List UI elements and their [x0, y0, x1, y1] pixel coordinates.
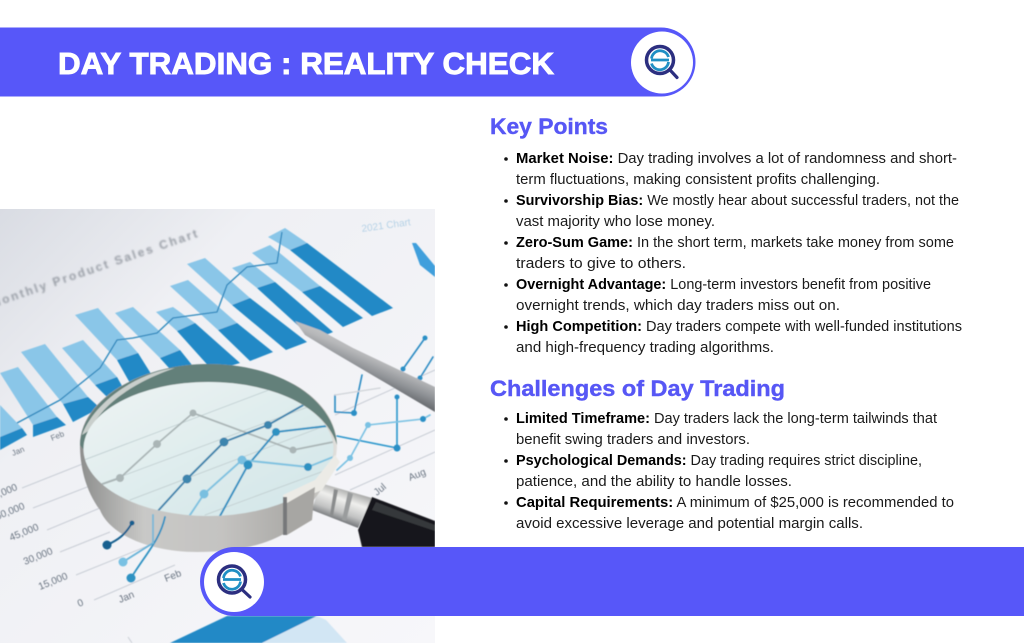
bullet: psychological demands: Psychological Demands: Day trading requires strict discipline,: [516, 452, 922, 469]
lower bar fragment: [170, 616, 317, 643]
axis labels: Jul: [372, 482, 389, 498]
bullet: survivorship bias: vast majority who lose money.: [516, 213, 715, 230]
axis labels: 45,000: [8, 522, 41, 544]
bullet: survivorship bias: Survivorship Bias: We mostly hear about successful traders, not the: [516, 192, 959, 209]
pen: [295, 321, 435, 412]
axis labels: Jan: [10, 445, 26, 458]
magnifier clip: [283, 455, 340, 505]
banner shape: [200, 547, 1024, 616]
bullet: zero-sum game: traders to give to others.: [516, 255, 686, 272]
bullet: psychological demands: patience, and the ability to handle losses.: [516, 473, 792, 490]
logo: top: [631, 32, 693, 94]
bullet: capital requirements: [504, 494, 954, 532]
bullet: high competition: [504, 318, 962, 356]
axis labels: [0, 429, 428, 610]
magnifier band: [80, 364, 337, 552]
axis labels: Jan: [117, 590, 136, 606]
top banner: [0, 28, 696, 96]
bar chart: [0, 217, 435, 643]
axis labels: Feb: [163, 568, 184, 585]
bullet: limited timeframe: benefit swing traders and investors.: [516, 431, 750, 448]
lens charts: [84, 382, 340, 518]
magnifier rim: [80, 364, 337, 450]
photo: magnifying glass over charts: [0, 209, 435, 643]
blue blot top right: [412, 243, 435, 277]
bullet: high competition: High Competition: Day traders compete with well-funded institutions: [516, 318, 962, 335]
line charts outside lens: [335, 338, 433, 470]
heading: key points: Key Points: [490, 114, 608, 139]
axis labels: Aug: [407, 467, 428, 484]
bullet: psychological demands: [504, 452, 922, 490]
section: challenges of day trading: [490, 376, 954, 532]
logo: bottom: [204, 552, 264, 612]
bullet: survivorship bias: [504, 192, 959, 230]
bullet: high competition: and high-frequency trading algorithms.: [516, 339, 774, 356]
axis labels: 30,000: [22, 546, 55, 568]
paper background: [0, 209, 435, 643]
bottom banner: [200, 547, 1024, 616]
axis labels: Feb: [49, 429, 66, 443]
bullet: market noise: [504, 150, 957, 188]
title: DAY TRADING : REALITY CHECK: [58, 46, 555, 81]
axis labels: 15,000: [37, 571, 70, 593]
trend line: [17, 232, 282, 423]
magnifier lens: [84, 382, 334, 516]
line reflections on band: [107, 515, 165, 578]
axis labels: 0: [76, 597, 86, 610]
bullet: capital requirements: avoid excessive leverage and potential margin calls.: [516, 515, 863, 532]
heading: challenges: Challenges of Day Trading: [490, 376, 785, 401]
bullet: overnight advantage: [504, 276, 931, 314]
banner shape: [0, 28, 696, 96]
bullet: overnight advantage: Overnight Advantage: Long-term investors benefit from positive: [516, 276, 931, 293]
bullet: overnight advantage: overnight trends, which day traders miss out on.: [516, 297, 840, 314]
bullet: limited timeframe: [504, 410, 938, 448]
bullet: market noise: term fluctuations, making consistent profits challenging.: [516, 171, 880, 188]
section: key points: [490, 114, 962, 356]
bullet: capital requirements: Capital Requirements: A minimum of $25,000 is recommended to: [516, 494, 954, 511]
bullet: market noise: Market Noise: Day trading involves a lot of randomness and short-: [516, 150, 957, 167]
bar chart: 2021 Chart: [361, 217, 412, 235]
bullet: zero-sum game: Zero-Sum Game: In the short term, markets take money from some: [516, 234, 954, 251]
bullet: zero-sum game: [504, 234, 954, 272]
magnifier handle: [312, 483, 372, 528]
grid lines: [22, 370, 435, 643]
bullet: limited timeframe: Limited Timeframe: Day traders lack the long-term tailwinds that: [516, 410, 938, 427]
